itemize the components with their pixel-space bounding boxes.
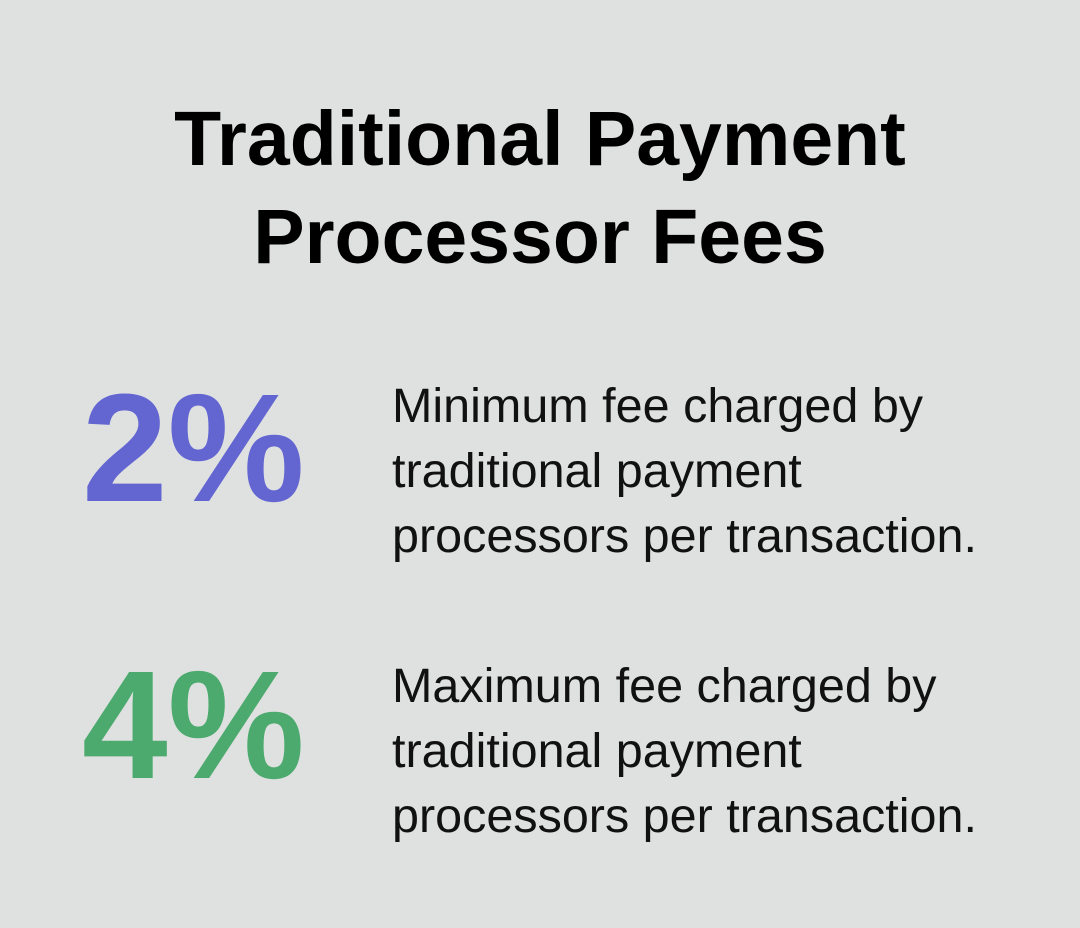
text: minimum fee: processors per transaction. [392, 509, 977, 563]
text: minimum fee [392, 379, 977, 563]
text: minimum fee: traditional payment [392, 444, 802, 498]
text: maximum fee: traditional payment [392, 724, 802, 778]
text: maximum fee: Maximum fee charged by [392, 659, 937, 713]
title [174, 96, 906, 280]
text: minimum fee: Minimum fee charged by [392, 379, 923, 433]
stat: 2%: 2% [82, 362, 305, 534]
stat: 4%: 4% [82, 639, 305, 811]
text: maximum fee: processors per transaction. [392, 789, 977, 843]
title: Traditional Payment [174, 96, 906, 182]
text: maximum fee [392, 659, 977, 843]
title: Processor Fees [253, 194, 827, 280]
